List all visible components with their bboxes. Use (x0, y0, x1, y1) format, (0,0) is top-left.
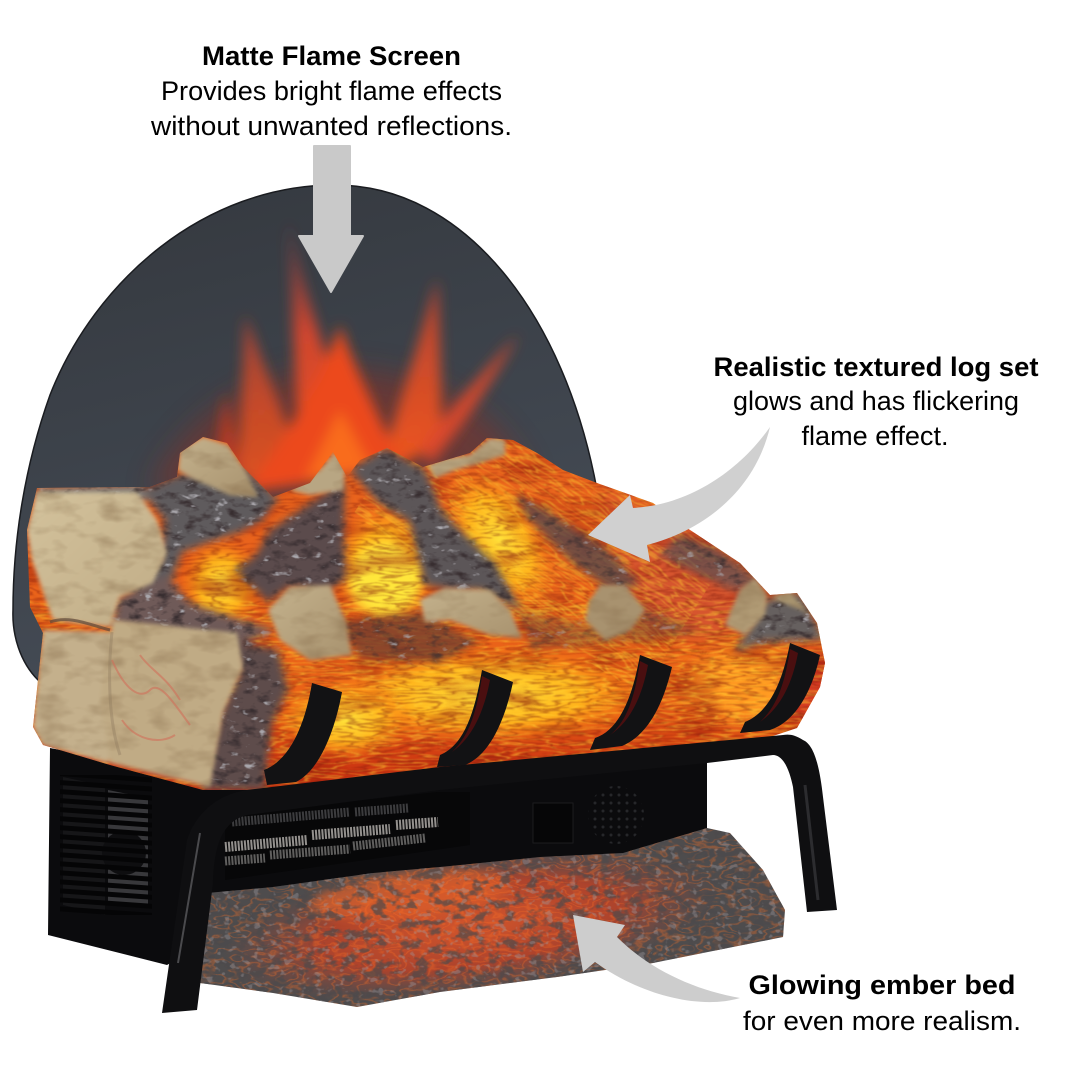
log set (27, 437, 825, 790)
charred bark patches (37, 448, 825, 790)
heater grille (225, 792, 470, 880)
heading: log set: flame effect. (802, 421, 948, 451)
grate hooks (264, 643, 820, 785)
lava veins (27, 438, 825, 790)
projected flames (150, 218, 530, 510)
lava base (20, 430, 830, 792)
hook glow faces (452, 649, 798, 752)
speaker holes (588, 786, 644, 844)
heading: log set (714, 352, 1038, 451)
icon: side vents and fan (60, 775, 152, 915)
control panel (533, 803, 573, 843)
heater base unit (48, 748, 707, 965)
heading: matte flame screen: without unwanted reflections. (150, 111, 512, 141)
heading: matte flame screen (150, 41, 512, 141)
heading: matte flame screen: Matte Flame Screen (202, 41, 461, 71)
red veins and crevices on tan block (50, 620, 190, 755)
heading: log set: glows and has flickering (733, 386, 1019, 416)
heading: log set: Realistic textured log set (714, 352, 1038, 382)
ember bed (200, 828, 785, 1007)
heading: ember bed: Glowing ember bed (748, 970, 1016, 1000)
flame screen panel (13, 185, 597, 700)
heading: matte flame screen: Provides bright flame effects (161, 76, 502, 106)
arrow: log set (588, 427, 770, 562)
grate rail and legs (162, 735, 837, 1013)
heading: ember bed (743, 970, 1021, 1036)
arrow: flame screen (299, 146, 363, 292)
glowing hot regions (184, 476, 825, 758)
heading: ember bed: for even more realism. (743, 1006, 1021, 1036)
arrow: ember bed (573, 915, 740, 1002)
fire grate (162, 643, 837, 1013)
tan log ends (27, 437, 808, 787)
